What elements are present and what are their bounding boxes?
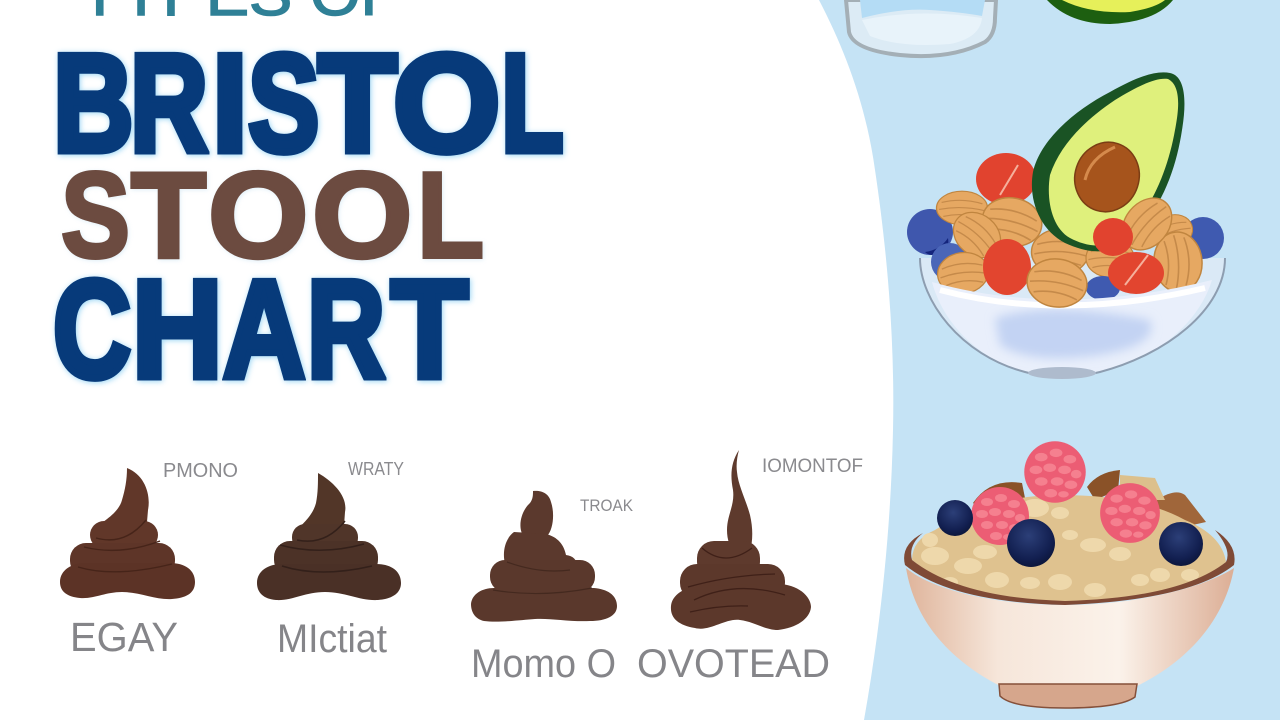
heading: bristol: R: [130, 26, 208, 181]
heading: bristol: S: [248, 26, 320, 181]
icon: oatmeal bowl with berries: [904, 441, 1235, 708]
blueberries: [937, 500, 973, 536]
heading: bristol: B: [53, 26, 133, 181]
bowl foot: [999, 684, 1137, 708]
stool illustration 2: [257, 473, 401, 600]
avocado half: [1032, 72, 1184, 251]
stool illustration 1: [60, 468, 195, 599]
heading: bristol: O: [393, 26, 500, 181]
heading: stool: L: [417, 147, 484, 283]
heading: bristol: I: [212, 26, 248, 181]
heading: chart: H: [132, 252, 223, 407]
heading: stool: [60, 147, 485, 283]
heading: stool: S: [60, 147, 130, 283]
walnut pieces: [973, 482, 1025, 512]
heading: chart: R: [307, 252, 385, 407]
icon: avocado top: [1047, 0, 1173, 24]
heading: chart: [52, 252, 475, 407]
raspberries: [1024, 441, 1086, 503]
caption: egay: EGAY: [70, 614, 178, 660]
bowl body: [906, 568, 1234, 686]
small label: troak: TROAK: [580, 496, 634, 515]
heading: bristol: L: [501, 26, 564, 181]
heading: stool: O: [208, 147, 308, 283]
heading: bristol: [53, 26, 568, 181]
heading: chart: C: [52, 252, 131, 407]
small label: wraty: WRATY: [348, 459, 404, 479]
caption: ovotead: OVOTEAD: [637, 642, 830, 686]
glass bowl body: [932, 280, 1212, 376]
caption: mlctiat: MIctiat: [277, 617, 387, 661]
nuts back: [936, 191, 988, 225]
heading: bristol: T: [318, 26, 396, 181]
heading: stool: T: [131, 147, 207, 283]
background: blue curved panel: [819, 0, 1280, 720]
heading: stool: O: [312, 147, 412, 283]
oat mound: [912, 495, 1226, 602]
strawberry: [976, 153, 1036, 205]
heading: chart: A: [223, 252, 305, 407]
oat flakes: [921, 499, 1199, 597]
small label: iomontof: IOMONTOF: [762, 456, 863, 477]
glass bowl back: [920, 258, 1225, 377]
bowl rim: [904, 530, 1235, 605]
stool illustration 4: [671, 450, 811, 630]
small label: pmono: PMONO: [163, 460, 238, 482]
front nut: [1024, 255, 1090, 311]
stool illustration 3: [471, 491, 617, 622]
caption: momo o: Momo O: [471, 642, 616, 686]
nuts and strawberries front: [1112, 188, 1182, 260]
icon: nut and fruit bowl with avocado: [907, 72, 1225, 379]
heading: chart: T: [390, 252, 468, 407]
icon: glass of water: [846, 0, 996, 56]
blueberries: [907, 209, 953, 255]
avocado pit: [1066, 134, 1148, 220]
